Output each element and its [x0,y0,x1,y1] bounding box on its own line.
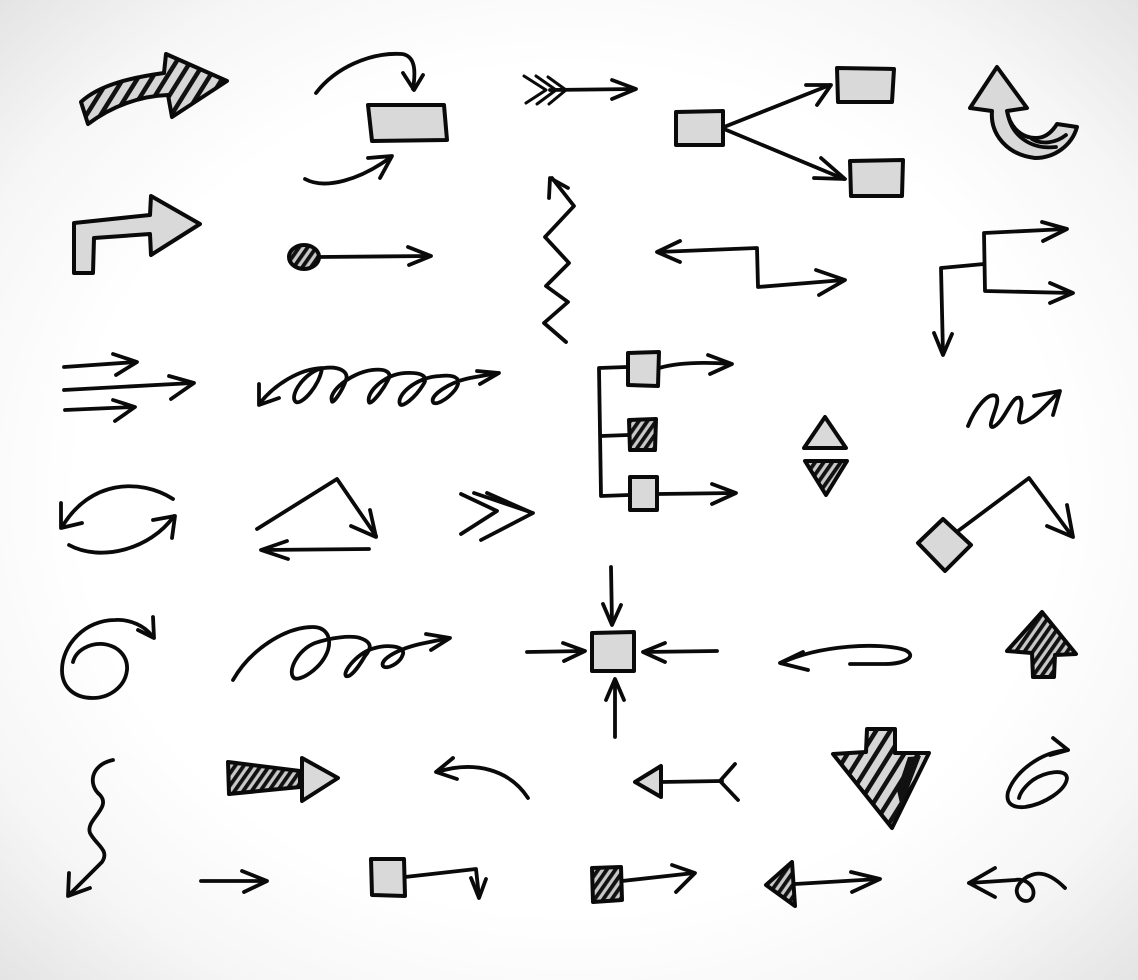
arrow: wavy down left [68,760,113,896]
arrow: loop left [780,646,910,670]
arrows into rectangle [305,54,447,183]
arrow: double chevron [461,493,533,540]
arrow: three-way branch [934,222,1073,355]
diagram: four arrows into centre box [527,567,717,737]
arrow: fletched straight arrow [524,76,636,104]
arrow: spiral curl [62,617,154,698]
arrow: big hatched down arrow [833,729,929,828]
arrows: circular pair [61,486,175,553]
arrow: fork tail with triangle [635,764,738,800]
arrow: small loop left [969,868,1065,901]
arrow: curved up left [436,758,528,798]
arrow: box with bent arrow [371,859,486,898]
arrow: long looped swirl [233,627,450,680]
diagram: box branching to two boxes [676,68,903,196]
diagram: bracket with three boxes [599,352,736,510]
icon: up and down triangles [804,417,847,495]
arrow: hatched up arrow [1007,612,1076,677]
arrow: diamond with bent arrow [918,478,1073,571]
arrows: three parallel [64,354,194,421]
arrow: hatched curved arrow [81,54,227,124]
arrow: dot start arrow [289,245,431,269]
arrow: angled with return [257,479,376,559]
arrow: hatched box with arrow [592,865,695,902]
arrow: double-headed step arrow [657,241,845,295]
arrow: grey u-turn arrow [970,67,1077,158]
arrow: squiggle up right [968,391,1060,427]
arrow: short right [201,871,267,892]
arrow: grey bent arrow [74,196,200,273]
arrow: oval curl [1007,738,1068,807]
arrow: spiral loops [259,368,499,405]
arrow: hatched bar with triangle [228,758,338,801]
arrow: zigzag up [544,178,574,342]
arrow: double-headed with triangle [766,862,880,906]
